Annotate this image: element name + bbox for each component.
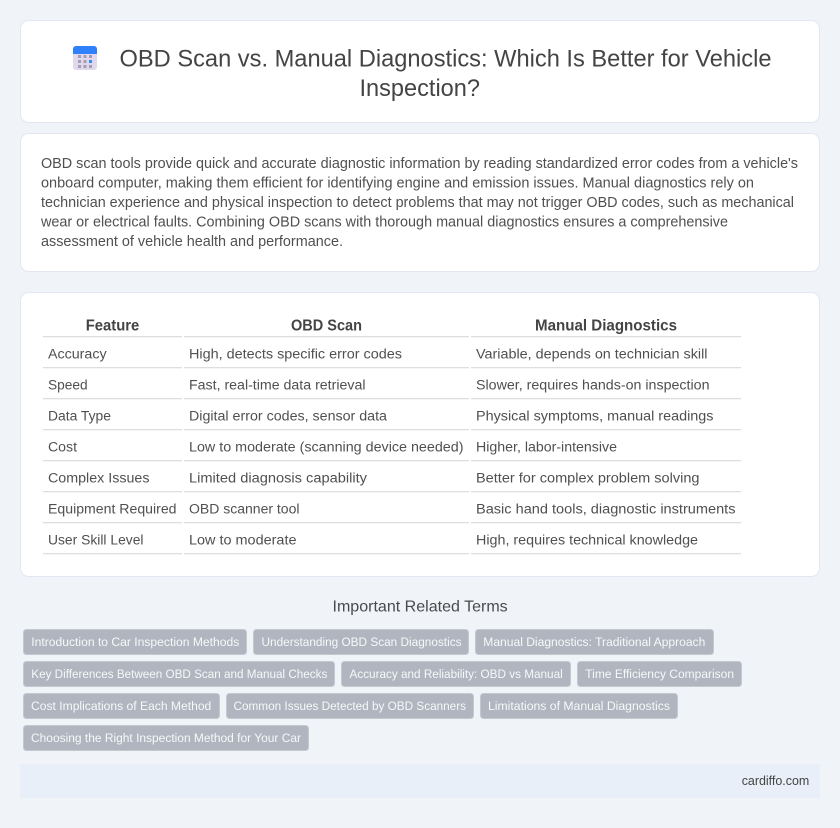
row: accuracy: High, detects specific error codes [189,346,402,362]
row: cost [48,439,617,455]
summary paragraph: onboard computer, making them efficient for identifying engine and emission issues. Manual diagnostics rely on [41,176,754,192]
tag: Accuracy and Reliability: OBD vs Manual [350,667,563,681]
summary paragraph [40,156,798,250]
table rules [43,336,741,554]
row: speed [48,377,710,393]
tag [476,630,714,654]
icon: calendar [73,46,97,70]
row: accuracy [48,346,708,362]
row: speed: Fast, real-time data retrieval [189,377,366,393]
footer bar [20,764,820,798]
row: cost: Low to moderate (scanning device needed) [189,439,464,455]
row: speed: Speed [48,377,88,393]
tag [24,630,246,654]
title: OBD Scan vs. Manual Diagnostics: Which Is Better for Vehicle [120,46,772,72]
row: complex issues: Limited diagnosis capability [189,470,368,486]
row: user skill level [48,532,698,548]
row: equipment required: Equipment Required [48,501,176,517]
tag [24,694,220,718]
tag: Time Efficiency Comparison [585,667,734,681]
row: accuracy: Variable, depends on technician skill [476,346,708,362]
row: accuracy: Accuracy [48,346,108,362]
footer credit: cardiffo.com [742,773,809,788]
summary paragraph: assessment of vehicle health and performance. [41,234,343,250]
row: equipment required [48,501,736,517]
row: user skill level: Low to moderate [189,532,297,548]
summary paragraph: OBD scan tools provide quick and accurate diagnostic information by reading standardized error codes from a vehicle's [41,156,798,172]
tag: Common Issues Detected by OBD Scanners [234,699,466,713]
row: cost: Higher, labor-intensive [476,439,617,455]
summary paragraph: technician experience and physical inspection to detect problems that may not trigger OBD codes, such as mechanical [41,195,794,211]
heading: important related terms: Important Related Terms [332,599,508,616]
tag: Limitations of Manual Diagnostics [488,699,670,713]
tag [254,630,468,654]
tag [24,726,308,750]
row: complex issues [48,470,700,486]
row: complex issues: Better for complex problem solving [476,470,700,486]
tag: Cost Implications of Each Method [31,699,211,713]
panel: summary text [20,134,820,272]
panel: title card [20,20,820,122]
summary paragraph: wear or electrical faults. Combining OBD scans with thorough manual diagnostics ensures a comprehensive [40,214,728,230]
tag: Key Differences Between OBD Scan and Manual Checks [31,667,327,681]
row: speed: Slower, requires hands-on inspection [476,377,710,393]
panel: comparison table [20,292,820,576]
table header: OBD Scan [291,318,362,335]
tag [226,694,474,718]
tag [480,694,678,718]
tag: Manual Diagnostics: Traditional Approach [483,635,705,649]
title [120,46,772,102]
tag [342,662,570,686]
tag: Choosing the Right Inspection Method for Your Car [31,731,301,745]
table header: Feature [86,318,140,335]
row: equipment required: OBD scanner tool [189,501,300,517]
row: data type [48,408,714,424]
tag [578,662,742,686]
tag [24,662,334,686]
table header: Manual Diagnostics [535,318,677,335]
row: user skill level: High, requires technical knowledge [476,532,698,548]
row: complex issues: Complex Issues [48,470,150,486]
row: data type: Physical symptoms, manual readings [476,408,714,424]
related term tags [24,630,742,750]
table header [86,318,677,335]
row: cost: Cost [48,439,77,455]
tag: Introduction to Car Inspection Methods [31,635,239,649]
title: Inspection? [360,75,480,102]
tag: Understanding OBD Scan Diagnostics [262,635,462,649]
row: data type: Digital error codes, sensor data [189,408,387,424]
row: equipment required: Basic hand tools, diagnostic instruments [476,501,736,517]
row: data type: Data Type [48,408,111,424]
row: user skill level: User Skill Level [48,532,144,548]
